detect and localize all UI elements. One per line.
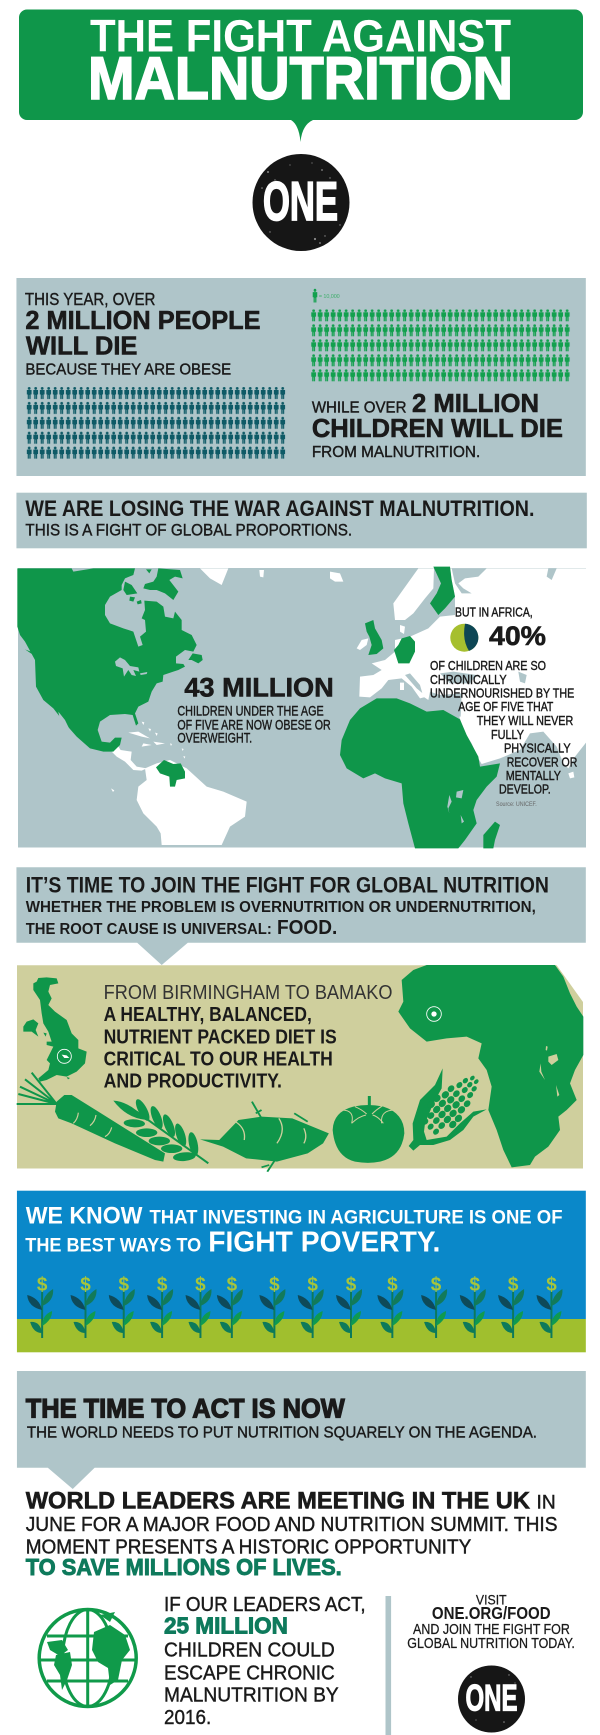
stat: Africa 40 percent: CHRONICALLY bbox=[430, 673, 507, 687]
icon row: dollar plants: $ bbox=[118, 1274, 129, 1296]
panel: investing in agriculture bbox=[17, 1191, 586, 1352]
title banner: MALNUTRITION bbox=[88, 45, 513, 112]
ONE logo top bbox=[252, 154, 350, 251]
map: Americas bbox=[17, 568, 264, 845]
stat: 43 million bbox=[177, 673, 334, 746]
text block: world leaders: JUNE FOR A MAJOR FOOD AND NUTRITION SUMMIT. THIS bbox=[26, 1514, 558, 1536]
stat: Africa 40 percent: BUT IN AFRICA, bbox=[455, 606, 533, 620]
pie chart: 40 percent bbox=[450, 624, 478, 652]
text block: world leaders: WORLD LEADERS ARE MEETING IN THE UK bbox=[26, 1487, 531, 1514]
panel: time to act: THE WORLD NEEDS TO PUT NUTRITION SQUARELY ON THE AGENDA. bbox=[27, 1424, 537, 1441]
stat: Africa 40 percent: 40% bbox=[489, 621, 546, 651]
text block: world leaders: TO SAVE MILLIONS OF LIVES. bbox=[26, 1554, 342, 1580]
diet text: AND PRODUCTIVITY. bbox=[104, 1070, 282, 1092]
panel: food and diet bbox=[17, 965, 583, 1172]
icon: tomato bbox=[333, 1096, 404, 1163]
stat: Africa 40 percent: FULLY bbox=[491, 728, 525, 742]
title banner bbox=[19, 10, 583, 142]
malnutrition text bbox=[312, 390, 563, 461]
icon row: dollar plants: $ bbox=[469, 1274, 480, 1296]
agriculture text: FIGHT POVERTY. bbox=[208, 1227, 440, 1259]
pictogram legend: = 10,000 bbox=[319, 294, 340, 300]
panel: losing the war: THIS IS A FIGHT OF GLOBAL PROPORTIONS. bbox=[25, 522, 352, 540]
ONE logo top: ONE bbox=[263, 170, 338, 232]
panel: join the fight: IT’S TIME TO JOIN THE FIGHT FOR GLOBAL NUTRITION bbox=[26, 872, 549, 897]
diet text: CRITICAL TO OUR HEALTH bbox=[104, 1048, 333, 1070]
panel: join the fight: FOOD. bbox=[277, 917, 337, 939]
text block: world leaders: MOMENT PRESENTS A HISTORIC OPPORTUNITY bbox=[26, 1536, 471, 1558]
panel: join the fight bbox=[16, 867, 586, 965]
divider bbox=[386, 1596, 391, 1735]
text block: 25 million: 2016. bbox=[164, 1707, 211, 1729]
call to action: AND JOIN THE FIGHT FOR bbox=[413, 1622, 570, 1638]
diet text: A HEALTHY, BALANCED, bbox=[104, 1004, 312, 1026]
text block: world leaders bbox=[26, 1487, 558, 1580]
agriculture text: WE KNOW bbox=[26, 1202, 143, 1229]
icon row: dollar plants: $ bbox=[269, 1274, 280, 1296]
malnutrition text: CHILDREN WILL DIE bbox=[312, 415, 563, 443]
ONE logo bottom bbox=[458, 1666, 525, 1732]
stat: 43 million: CHILDREN UNDER THE AGE bbox=[177, 704, 324, 719]
stat: 43 million: 43 MILLION bbox=[184, 673, 334, 703]
call to action bbox=[407, 1591, 575, 1652]
malnutrition text: FROM MALNUTRITION. bbox=[312, 444, 480, 461]
diet text: NUTRIENT PACKED DIET IS bbox=[104, 1026, 337, 1048]
text block: world leaders: IN bbox=[537, 1492, 556, 1513]
icon row: dollar plants: $ bbox=[431, 1274, 442, 1296]
stat: Africa 40 percent: AGE OF FIVE THAT bbox=[458, 700, 554, 714]
agriculture text: THAT INVESTING IN AGRICULTURE IS ONE OF bbox=[149, 1207, 563, 1228]
stat: 43 million: OF FIVE ARE NOW OBESE OR bbox=[177, 717, 331, 732]
stat: Africa 40 percent bbox=[430, 606, 577, 808]
pictogram: malnutrition deaths bbox=[311, 309, 571, 382]
stat: 43 million: OVERWEIGHT. bbox=[177, 731, 252, 746]
diet text: FROM BIRMINGHAM TO BAMAKO bbox=[104, 982, 393, 1004]
panel: join the fight: WHETHER THE PROBLEM IS OVERNUTRITION OR UNDERNUTRITION, bbox=[26, 899, 536, 916]
icon row: dollar plants: $ bbox=[195, 1274, 206, 1296]
icon: sweet potato bbox=[200, 1102, 329, 1172]
stat: Africa 40 percent: Source: UNICEF. bbox=[496, 802, 537, 808]
call to action: ONE.ORG/FOOD bbox=[432, 1603, 551, 1623]
pictogram: obesity deaths bbox=[26, 387, 286, 460]
agriculture text: THE BEST WAYS TO bbox=[25, 1236, 201, 1257]
ONE logo bottom: ONE bbox=[466, 1678, 518, 1719]
obesity text: THIS YEAR, OVER bbox=[25, 289, 155, 309]
icon: globe bbox=[39, 1610, 136, 1706]
stat: Africa 40 percent: PHYSICALLY bbox=[504, 741, 571, 755]
panel: time to act: THE TIME TO ACT IS NOW bbox=[26, 1393, 345, 1423]
icon row: dollar plants: $ bbox=[227, 1274, 238, 1296]
obesity text: 2 MILLION PEOPLE bbox=[25, 307, 261, 335]
panel: losing the war bbox=[16, 493, 587, 548]
agriculture text bbox=[25, 1202, 563, 1259]
icon row: dollar plants: $ bbox=[387, 1274, 398, 1296]
panel: time to act bbox=[17, 1371, 586, 1489]
obesity text: WILL DIE bbox=[26, 332, 137, 360]
icon row: dollar plants bbox=[27, 1274, 562, 1338]
stat: Africa 40 percent: MENTALLY bbox=[506, 769, 562, 783]
stat: Africa 40 percent: OF CHILDREN ARE SO bbox=[430, 659, 546, 673]
obesity text bbox=[25, 289, 261, 379]
text block: 25 million: 25 MILLION bbox=[164, 1612, 288, 1638]
icon row: dollar plants: $ bbox=[157, 1274, 168, 1296]
text block: 25 million bbox=[164, 1594, 366, 1729]
malnutrition text: 2 MILLION bbox=[412, 390, 539, 418]
text block: 25 million: MALNUTRITION BY bbox=[164, 1685, 339, 1707]
icon row: dollar plants: $ bbox=[508, 1274, 519, 1296]
stat: Africa 40 percent: THEY WILL NEVER bbox=[477, 714, 573, 728]
icon row: dollar plants: $ bbox=[346, 1274, 357, 1296]
map: Europe, Asia and Africa bbox=[330, 567, 586, 848]
panel: losing the war: WE ARE LOSING THE WAR AGAINST MALNUTRITION. bbox=[25, 496, 535, 521]
icon: corn bbox=[409, 1066, 489, 1151]
title banner: THE FIGHT AGAINST bbox=[90, 11, 511, 62]
icon: Africa map bbox=[398, 965, 583, 1167]
panel: world map bbox=[17, 567, 586, 848]
icon row: dollar plants: $ bbox=[80, 1274, 91, 1296]
icon row: dollar plants: $ bbox=[546, 1274, 557, 1296]
text block: 25 million: ESCAPE CHRONIC bbox=[164, 1662, 335, 1684]
diet text bbox=[104, 982, 393, 1092]
call to action: GLOBAL NUTRITION TODAY. bbox=[407, 1636, 575, 1652]
icon: wheat bbox=[113, 1097, 208, 1163]
stat: Africa 40 percent: DEVELOP. bbox=[499, 782, 551, 796]
panel: deaths comparison bbox=[16, 278, 586, 476]
icon row: dollar plants: $ bbox=[37, 1274, 48, 1296]
stat: Africa 40 percent: RECOVER OR bbox=[507, 755, 577, 769]
call to action: VISIT bbox=[476, 1591, 507, 1607]
stat: Africa 40 percent: UNDERNOURISHED BY THE bbox=[430, 687, 574, 701]
icon row: dollar plants: $ bbox=[307, 1274, 318, 1296]
text block: 25 million: IF OUR LEADERS ACT, bbox=[164, 1594, 366, 1616]
malnutrition text: WHILE OVER bbox=[312, 399, 406, 417]
pictogram legend bbox=[313, 289, 340, 302]
obesity text: BECAUSE THEY ARE OBESE bbox=[25, 361, 231, 379]
text block: 25 million: CHILDREN COULD bbox=[164, 1640, 335, 1662]
panel: join the fight: THE ROOT CAUSE IS UNIVERSAL: bbox=[26, 921, 272, 938]
icon: carrot bbox=[17, 1073, 165, 1162]
icon: UK map bbox=[23, 977, 87, 1082]
